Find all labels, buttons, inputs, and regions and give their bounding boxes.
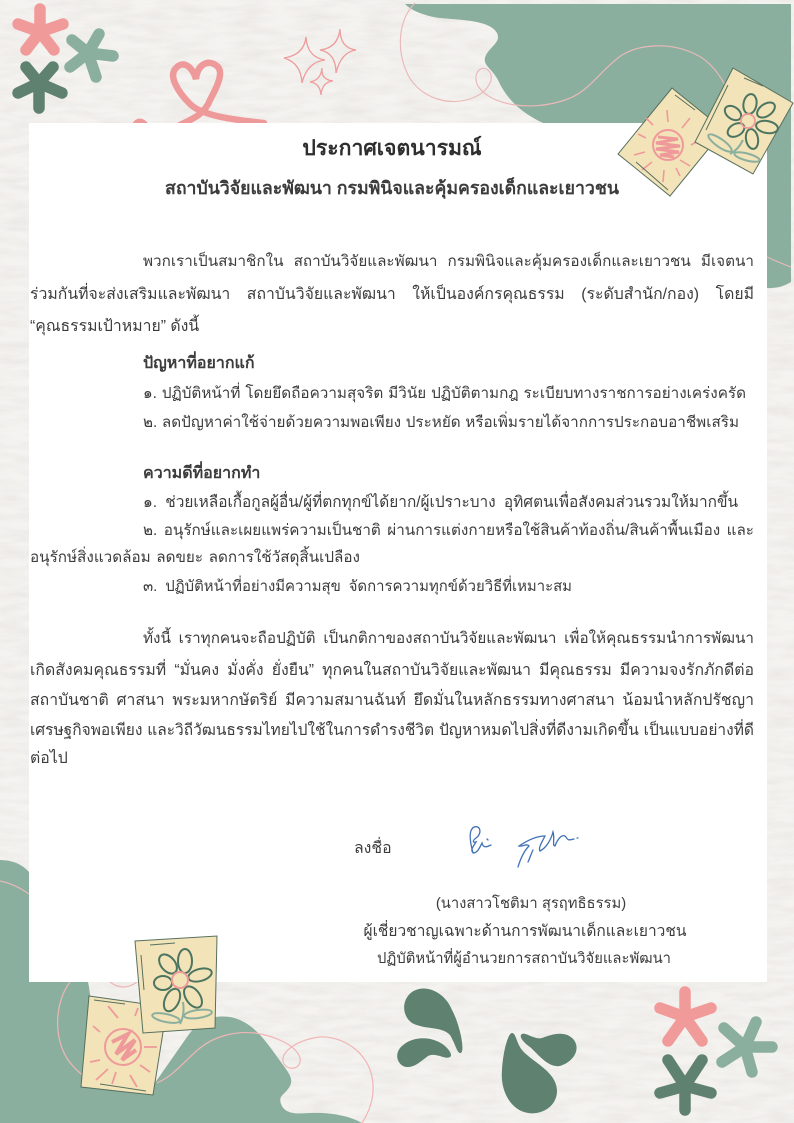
pink arc under panel <box>110 982 137 987</box>
good deeds to do: ๓. ปฏิบัติหน้าที่อย่างมีความสุข จัดการความทุกข์ด้วยวิธีที่เหมาะสม <box>143 579 572 595</box>
left pink line <box>0 881 29 894</box>
bottom left green blob <box>0 860 362 1123</box>
closing paragraph: สถาบันชาติ ศาสนา พระมหากษัตริย์ มีความสมานฉันท์ ยึดมั่นในหลักธรรมทางศาสนา น้อมนำหลักปรัชญา <box>30 692 754 709</box>
problems to solve: ปัญหาที่อยากแก้ <box>143 355 255 372</box>
problems to solve: ๑. ปฏิบัติหน้าที่ โดยยึดถือความสุจริต มีวินัย ปฏิบัติตามกฎ ระเบียบทางราชการอย่างเคร่งครัด <box>143 385 746 402</box>
problems to solve: ๒. ลดปัญหาค่าใช้จ่ายด้วยความพอเพียง ประหยัด หรือเพิ่มรายได้จากการประกอบอาชีพเสริม <box>143 414 739 431</box>
closing paragraph: เกิดสังคมคุณธรรมที่ “มั่นคง มั่งคั่ง ยั่งยืน” ทุกคนในสถาบันวิจัยและพัฒนา มีคุณธรรม มีความจงรักภักดีต่อ <box>30 662 754 679</box>
intro paragraph: พวกเราเป็นสมาชิกใน สถาบันวิจัยและพัฒนา กรมพินิจและคุ้มครองเด็กและเยาวชน มีเจตนา <box>143 253 754 270</box>
closing paragraph: ต่อไป <box>30 750 68 767</box>
sticky note: sun top <box>618 88 724 196</box>
asterisks bottom right <box>660 992 772 1110</box>
intro paragraph: “คุณธรรมเป้าหมาย” ดังนี้ <box>30 318 199 335</box>
good deeds to do: ๑. ช่วยเหลือเกื้อกูลผู้อื่น/ผู้ที่ตกทุกข์ได้ยาก/ผู้เปราะบาง อุทิศตนเพื่อสังคมส่วนรวมให้มากขึ้น <box>143 494 738 511</box>
closing paragraph: ทั้งนี้ เราทุกคนจะถือปฏิบัติ เป็นกติกาของสถาบันวิจัยและพัฒนา เพื่อให้คุณธรรมนำการพัฒนา <box>143 630 754 647</box>
good deeds to do: อนุรักษ์สิ่งแวดล้อม ลดขยะ ลดการใช้วัสดุสิ้นเปลือง <box>30 549 360 566</box>
top right green blob <box>405 4 791 288</box>
problems to solve <box>143 351 746 431</box>
signatory name: (นางสาวโชติมา สุรฤทธิธรรม) <box>436 896 626 912</box>
sticky note: flower bottom <box>135 936 217 1033</box>
sticky note: flower top <box>695 68 793 174</box>
good deeds to do: ๒. อนุรักษ์และเผยแพร่ความเป็นชาติ ผ่านการแต่งกายหรือใช้สินค้าท้องถิ่น/สินค้าพื้นเมือง และ <box>143 522 754 539</box>
subtitle: สถาบันวิจัยและพัฒนา กรมพินิจและคุ้มครองเด็กและเยาวชน <box>165 178 619 198</box>
signature label: ลงชื่อ <box>354 840 392 857</box>
signatory title: ผู้เชี่ยวชาญเฉพาะด้านการพัฒนาเด็กและเยาวชน <box>364 923 686 940</box>
green drops <box>397 988 577 1113</box>
sparkles <box>284 29 356 95</box>
intro paragraph: ร่วมกันที่จะส่งเสริมและพัฒนา สถาบันวิจัยและพัฒนา ให้เป็นองค์กรคุณธรรม (ระดับสำนัก/กอง) โดยมี <box>30 286 754 303</box>
title: ประกาศเจตนารมณ์ <box>302 137 482 160</box>
signatory acting position: ปฏิบัติหน้าที่ผู้อำนวยการสถาบันวิจัยและพัฒนา <box>377 951 671 967</box>
signature <box>470 827 578 867</box>
sticky note: sun bottom <box>81 996 167 1095</box>
right pink line <box>767 257 791 267</box>
intro paragraph <box>30 252 754 336</box>
closing paragraph <box>30 627 754 767</box>
good deeds to do <box>30 461 754 595</box>
bottom pink ribbon line <box>58 982 373 1123</box>
white letter panel <box>29 123 767 982</box>
top pink ribbon line <box>400 3 725 106</box>
heart ribbon <box>135 63 264 126</box>
closing paragraph: เศรษฐกิจพอเพียง และวิถีวัฒนธรรมไทยไปใช้ในการดำรงชีวิต ปัญหาหมดไปสิ่งที่ดีงามเกิดขึ้น เป็นแบบอย่างที่ดี <box>30 722 754 739</box>
asterisks top left <box>18 9 113 108</box>
good deeds to do: ความดีที่อยากทำ <box>143 465 260 482</box>
